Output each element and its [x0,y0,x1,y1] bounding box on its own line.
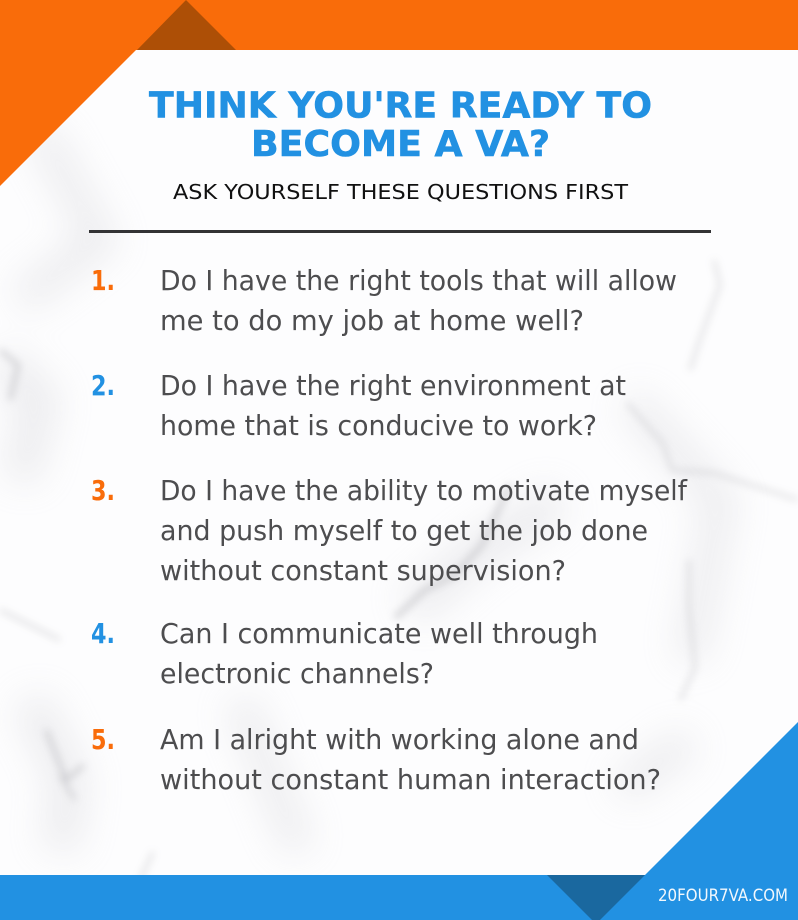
title [149,86,652,165]
dark blue triangle [547,875,645,920]
number 4: 4. [91,617,115,650]
question 1 [91,264,677,337]
question 5 [91,723,661,796]
number 3: 3. [91,474,115,507]
question 3 text [160,474,688,587]
blue corner banner [0,722,798,920]
question 5 text [160,723,661,796]
title: THINK YOU'RE READY TO [149,86,652,126]
dark orange triangle [137,0,236,50]
divider rule [89,230,711,233]
question 2 [91,369,626,442]
question 3 text: without constant supervision? [160,554,566,587]
question 5 text: Am I alright with working alone and [160,723,639,756]
number 1: 1. [91,264,115,297]
question 4 [91,617,598,690]
question 4 text [160,617,598,690]
title: BECOME A VA? [251,124,550,165]
question 1 text: Do I have the right tools that will allow [160,264,677,297]
question 1 text: me to do my job at home well? [160,304,584,337]
question 2 text: home that is conducive to work? [160,409,597,442]
number 2: 2. [91,369,115,402]
question 4 text: Can I communicate well through [160,617,598,650]
question 2 text [160,369,626,442]
question 3 text: and push myself to get the job done [160,514,648,547]
question 1 text [160,264,677,337]
number 5: 5. [91,723,115,756]
subtitle: ASK YOURSELF THESE QUESTIONS FIRST [173,180,629,204]
question 5 text: without constant human interaction? [160,763,661,796]
question 4 text: electronic channels? [160,657,434,690]
orange corner banner [0,0,798,186]
question 2 text: Do I have the right environment at [160,369,626,402]
question 3 [91,474,688,587]
question 3 text: Do I have the ability to motivate myself [160,474,688,507]
